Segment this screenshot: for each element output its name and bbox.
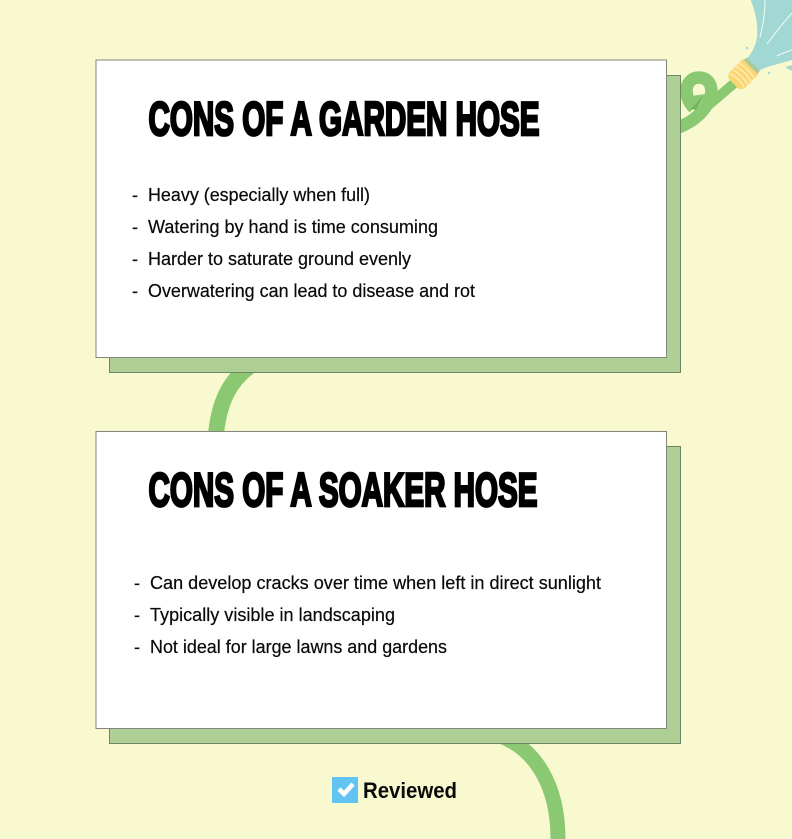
list of cons <box>132 185 475 301</box>
list of cons: Watering by hand is time consuming <box>148 217 438 237</box>
logo: Reviewed <box>332 777 457 803</box>
panel: cons of a garden hose <box>96 60 680 372</box>
brass coupling <box>726 56 761 92</box>
icon: check box <box>332 777 358 803</box>
list of cons: Can develop cracks over time when left in direct sunlight <box>150 573 601 593</box>
hose loop <box>670 78 738 130</box>
list of cons: - <box>134 573 140 593</box>
card <box>96 60 666 358</box>
water spray <box>746 0 792 72</box>
list of cons: Typically visible in landscaping <box>150 605 395 625</box>
list of cons: Not ideal for large lawns and gardens <box>150 637 447 657</box>
list of cons: Overwatering can lead to disease and rot <box>148 281 475 301</box>
list of cons: - <box>134 637 140 657</box>
card <box>96 432 666 728</box>
icon: spraying hose nozzle <box>670 0 792 130</box>
list of cons: - <box>132 249 138 269</box>
heading: CONS OF A GARDEN HOSE <box>148 92 540 145</box>
hose segment between cards <box>216 362 256 440</box>
list of cons: - <box>132 185 138 205</box>
list of cons: Heavy (especially when full) <box>148 185 370 205</box>
heading: CONS OF A SOAKER HOSE <box>148 463 538 516</box>
wordmark: Reviewed <box>363 778 457 803</box>
list of cons: - <box>134 605 140 625</box>
list of cons: - <box>132 217 138 237</box>
panel: cons of a soaker hose <box>96 432 680 744</box>
card shadow <box>110 76 680 372</box>
list of cons: Harder to saturate ground evenly <box>148 249 411 269</box>
list of cons <box>134 573 601 657</box>
hose segment at bottom <box>498 735 558 839</box>
card shadow <box>110 446 680 744</box>
list of cons: - <box>132 281 138 301</box>
